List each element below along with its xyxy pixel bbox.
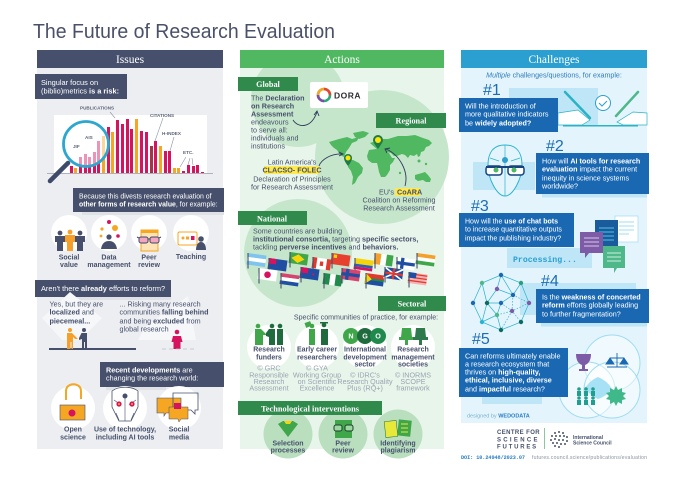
question 3: How will the use of chat bots [465, 218, 558, 226]
callout: divests research evaluation: Because this divests research evaluation of [79, 194, 212, 200]
question 4 [536, 289, 649, 326]
question 1: Will the introduction of [465, 102, 536, 110]
text: CoARA: Coalition on Reforming [362, 196, 436, 204]
icon: data management: management [87, 262, 131, 269]
world map [329, 131, 432, 185]
icon: peer review glasses: Peer [335, 440, 351, 448]
icon: international development sector: N [348, 332, 354, 340]
callout: recent developments: changing the research world: [106, 374, 198, 382]
icon: selection processes: processes [271, 448, 305, 454]
text: GYA: Excellence [300, 384, 334, 392]
text: GRC: © GRC [257, 364, 281, 372]
illustration: hands with pens [509, 88, 647, 126]
text: CLACSO-FOLEC: CLACSO- FOLEC [262, 166, 322, 174]
icon: data management: Data [101, 254, 117, 262]
background circles [244, 68, 449, 307]
callout: recent developments: Recent developments are [106, 366, 193, 374]
text: INORMS: SCOPE [400, 377, 426, 386]
title: The Future of Research Evaluation [33, 20, 335, 43]
icon: international development sector: International [344, 346, 386, 354]
heading: actions: Actions [324, 54, 360, 66]
question 2 [536, 153, 649, 198]
icon: research funders: Research [253, 346, 285, 354]
question 5 [459, 348, 568, 397]
logo: DORA [310, 82, 368, 108]
bar chart: metrics [47, 106, 213, 174]
icon: research management societies: management [391, 354, 435, 362]
icon: technology and AI robot: including AI tools [96, 434, 154, 442]
text: CLACSO-FOLEC [251, 158, 333, 192]
icon: research management societies: Research [397, 346, 429, 354]
icon: social value: Social [59, 254, 79, 262]
text: falling behind [120, 300, 209, 334]
icon: early career researchers: Early career [297, 346, 337, 354]
icon: open science: science [60, 434, 86, 442]
logo: international science council: International [573, 435, 604, 441]
panel: issues [35, 50, 224, 449]
question 5: and impactful research? [465, 384, 545, 394]
question 1: be widely adopted? [465, 118, 531, 128]
question 2: worldwide? [541, 182, 578, 190]
label: global [238, 77, 298, 91]
icon: early career researchers: researchers [297, 354, 337, 362]
label: regional [376, 113, 446, 128]
icon: peer review glasses: review [332, 448, 354, 454]
icon: peer review: Peer [141, 254, 157, 262]
question 5: a research ecosystem that [465, 360, 549, 368]
illustration: spotlights [42, 292, 196, 340]
icon: identifying plagiarism: Identifying [380, 440, 416, 448]
callout: recent developments [100, 362, 224, 390]
icon: identifying plagiarism [374, 410, 422, 458]
text: INORMS: © INORMS [395, 370, 431, 380]
map pin: Latin America [344, 154, 352, 166]
icon: peer review: review [138, 262, 160, 269]
icon: social value: value [60, 262, 78, 269]
text: falling behind: ... Risking many research [120, 300, 201, 308]
text: GYA: on Scientific [298, 377, 337, 386]
question 5: Can reforms ultimately enable [465, 352, 560, 360]
heading: issues [37, 50, 223, 68]
icon: peer review glasses [318, 410, 368, 458]
text: CoARA [362, 188, 436, 212]
icon: international development sector: development [343, 354, 387, 362]
text: falling behind: and being excluded from [120, 316, 201, 326]
callout: already efforts: Aren't there already efforts to reform? [41, 284, 165, 293]
question 2: inequity in science systems [542, 174, 629, 182]
icon: social value [51, 215, 87, 269]
question 1: more qualitative indicators [465, 110, 549, 118]
callout: metrics risk: Singular focus on [41, 78, 98, 87]
text: CoARA: EU's [379, 188, 394, 196]
icon: open science: Open [64, 426, 82, 434]
question 3: impact the publishing industry? [465, 236, 561, 242]
text: IDRC: Plus (RQ+) [347, 384, 383, 392]
logo: centre for science futures: FUTURES [497, 444, 538, 450]
text: localized and piecemeal: Yes, but they are [50, 300, 103, 308]
text: declaration on research assessment: endeavours [251, 118, 289, 126]
icon: data management [87, 215, 131, 269]
text: IDRC [337, 370, 393, 392]
text: institutional consortia [253, 226, 418, 252]
bar chart: metrics: PUBLICATIONS [80, 106, 114, 110]
question 3: to increase quantitative outputs [465, 226, 562, 234]
text: CoARA: Research Assessment [363, 204, 435, 212]
illustration: network [471, 273, 636, 332]
text: IDRC: © IDRC's [350, 370, 380, 380]
text: CLACSO-FOLEC: Latin America's [268, 158, 317, 166]
icon: open science [51, 384, 95, 442]
question 4: reform efforts globally leading [542, 300, 638, 310]
callout: divests research evaluation [73, 188, 224, 215]
illustration: venn diagram [482, 335, 640, 418]
icon: selection processes [264, 410, 312, 458]
icon: technology and AI robot [94, 386, 156, 442]
bar chart: metrics: ETC. [183, 150, 193, 155]
label: regional: Regional [396, 116, 427, 126]
text: falling behind: communities falling behind [120, 308, 209, 316]
text: declaration on research assessment: Assessment [251, 110, 294, 118]
text: falling behind: global research [120, 324, 169, 334]
icon: research funders: funders [256, 354, 282, 362]
icon: international development sector: G [362, 332, 368, 340]
text: institutional consortia: tackling perverse incentives and behaviors. [253, 242, 398, 252]
text: CLACSO-FOLEC: for Research Assessment [251, 182, 333, 192]
icon: international development sector: O [375, 332, 381, 340]
icon: identifying plagiarism: plagiarism [380, 448, 416, 454]
logo: centre for science futures: SCIENCE [497, 438, 540, 444]
logo: centre for science futures: CENTRE FOR [497, 430, 540, 436]
text: declaration on research assessment: individuals and [251, 134, 299, 142]
flags [246, 252, 436, 291]
icon: early career researchers [295, 321, 339, 369]
question 5: ethical, inclusive, diverse [465, 376, 552, 384]
panel: actions [238, 50, 449, 458]
text: GYA: © GYA [306, 364, 328, 372]
label: technological interventions: Technological interventions [261, 404, 360, 414]
question 4: to further fragmentation? [542, 310, 621, 318]
text: GYA: Working Group [293, 370, 341, 380]
heading: issues: Issues [116, 54, 145, 66]
text: GRC: Research [254, 377, 284, 386]
number: 2: #2 [546, 138, 564, 155]
heading: actions [240, 50, 444, 68]
text: INORMS [395, 370, 431, 392]
label: technological interventions [238, 401, 382, 415]
icon: peer review [131, 215, 167, 269]
callout: metrics risk [35, 74, 127, 99]
number: 1: #1 [483, 82, 501, 99]
text: url: futures.council.science/publications/evaluation [532, 455, 647, 461]
text: GRC: Responsible [249, 370, 289, 380]
callout: divests research evaluation: other forms of research value, for example: [79, 202, 218, 208]
question 4: Is the weakness of concerted [542, 292, 641, 302]
icon: research funders [247, 324, 291, 369]
arrow: to Europe [385, 148, 406, 186]
icon: magnifying glass: AIS [85, 135, 93, 140]
icon: technology and AI robot: Use of technology, [94, 426, 156, 434]
icon: international development sector: sector [354, 362, 376, 368]
illustration: AI head with glasses [473, 145, 535, 196]
label: sectoral [378, 296, 446, 311]
question 1 [459, 98, 558, 132]
illustration: excluded figure [162, 330, 194, 349]
question 2: How will AI tools for research [542, 156, 640, 166]
icon: teaching [173, 215, 209, 261]
heading: challenges [461, 50, 647, 68]
illustration: handshake figures [49, 328, 136, 350]
text: institutional consortia: institutional consortia, targeting specific sectors, [253, 234, 418, 244]
logo: international science council: Science Council [573, 440, 612, 446]
text: localized and piecemeal: localized and [50, 308, 94, 316]
icon: selection processes: Selection [272, 440, 304, 448]
icon: research management societies [391, 325, 435, 369]
label: national [238, 211, 307, 225]
icon: social media speech bubbles [157, 386, 201, 442]
text: processing: Processing... [513, 255, 577, 265]
text: DOI: DOI: 10.24948/2023.07 [461, 455, 525, 461]
question 5: thrives on high-quality, [465, 368, 540, 376]
bar chart: metrics: H-INDEX [162, 131, 182, 136]
text: GRC: Assessment [249, 384, 289, 392]
illustration: chat bot documents [507, 216, 638, 273]
label: national: National [257, 214, 288, 224]
arrow: to Latin America [319, 152, 343, 166]
logo: international science council [550, 431, 612, 448]
panel: challenges [459, 50, 649, 423]
icon: research management societies: societies [398, 362, 428, 368]
label: global: Global [256, 80, 281, 89]
arrow: to DORA [293, 111, 319, 126]
label: sectoral: Sectoral [398, 300, 427, 308]
text: declaration on research assessment [251, 94, 305, 150]
text: GYA [293, 364, 341, 392]
bar chart: metrics: CITATIONS [150, 113, 174, 118]
icon: social media speech bubbles: Social [169, 426, 189, 434]
icon: international development sector [343, 325, 387, 369]
text: GRC [249, 364, 289, 392]
question 3 [459, 213, 574, 247]
text: institutional consortia: Some countries are building [253, 226, 342, 236]
logo: DORA: DORA [334, 90, 361, 100]
number: 3: #3 [471, 198, 489, 215]
text: multiple challenges: Multiple challenges/questions, for example: [486, 72, 622, 80]
text: IDRC: Research Quality [337, 377, 393, 386]
text: CoARA: CoARA [397, 188, 422, 196]
text: localized and piecemeal [50, 300, 103, 326]
logo: centre for science futures [497, 428, 545, 450]
credit: designed by: designed by WEDODATA [467, 414, 530, 420]
text: declaration on research assessment: The Declaration [251, 94, 305, 102]
number: 4: #4 [541, 273, 559, 290]
text: declaration on research assessment: to serve all: [251, 126, 288, 134]
text: CLACSO-FOLEC: Declaration of Principles [253, 174, 331, 184]
icon: magnifying glass [50, 122, 108, 181]
map pin: Europe [373, 135, 383, 149]
text: declaration on research assessment: institutions [251, 142, 285, 150]
question 2: evaluation impact the current [542, 164, 637, 174]
icon: magnifying glass: JIF [73, 144, 80, 149]
text: localized and piecemeal: piecemeal... [50, 316, 90, 326]
callout: metrics risk: (biblio)metrics is a risk: [41, 86, 119, 96]
text: specific communities: Specific communities of practice, for example: [294, 314, 438, 322]
text: INORMS: framework [396, 384, 430, 392]
number: 5: #5 [472, 331, 490, 348]
callout: already efforts [35, 280, 171, 300]
text: declaration on research assessment: on Research [251, 102, 294, 110]
icon: teaching: Teaching [176, 254, 206, 261]
icon: social media speech bubbles: media [169, 434, 189, 442]
heading: challenges: Challenges [528, 54, 580, 66]
